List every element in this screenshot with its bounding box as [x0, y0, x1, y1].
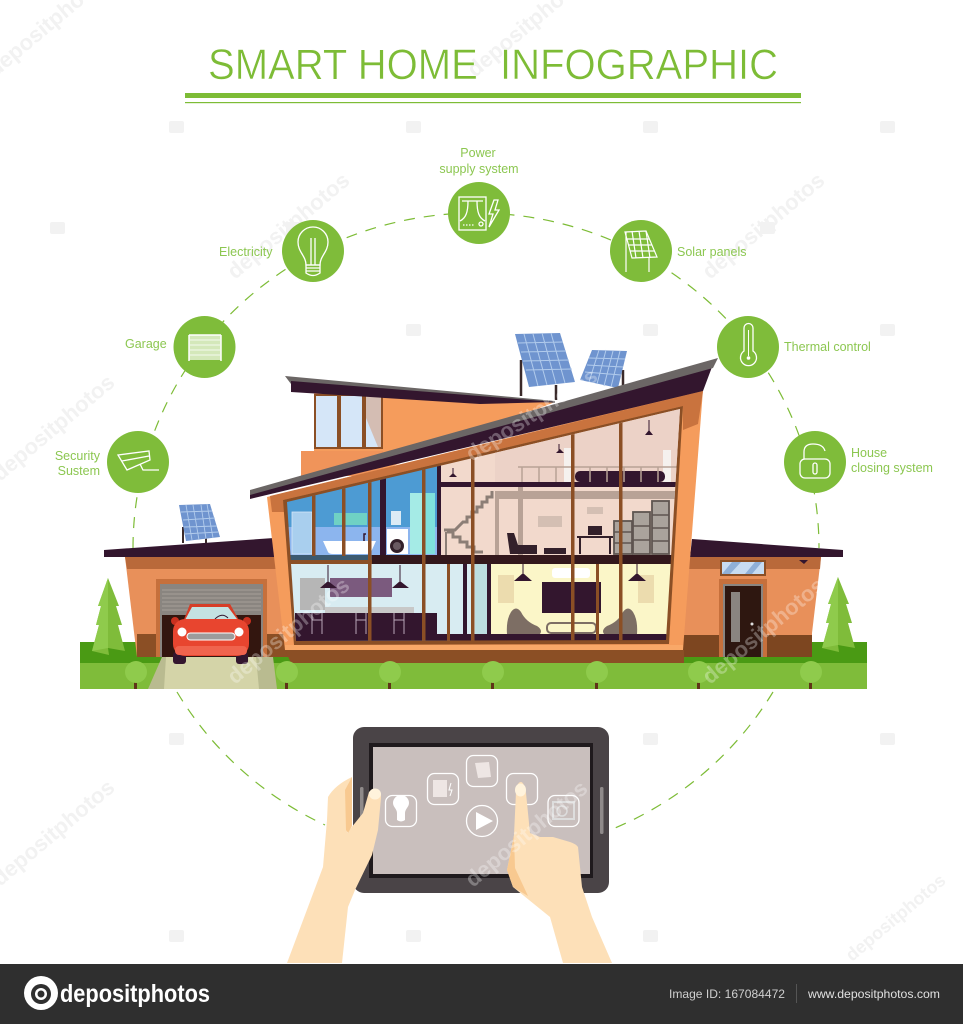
tree: right	[822, 577, 855, 652]
node: power supply system: supply system	[439, 162, 519, 176]
node: thermal control: Thermal control	[784, 340, 871, 354]
website: www.depositphotos.com	[807, 987, 940, 1001]
footer bar	[0, 964, 963, 1024]
node: garage: Garage	[125, 337, 167, 351]
watermark overlays: depositphotos	[222, 572, 354, 689]
window	[720, 560, 766, 576]
tablet	[353, 727, 609, 893]
footer logo: depositphotos	[60, 980, 210, 1008]
main house	[250, 333, 718, 663]
solar panel: garage roof	[179, 504, 220, 543]
interior rooms	[280, 400, 685, 642]
watermarks: depositphotos	[222, 167, 354, 284]
hand: right	[507, 782, 612, 963]
tablet app icons	[386, 756, 579, 836]
node: security system	[55, 431, 169, 493]
walls	[267, 390, 703, 650]
hand: left	[287, 777, 381, 963]
watermark overlays: depositphotos	[697, 572, 829, 689]
title: SMART HOME INFOGRAPHIC	[208, 41, 778, 89]
node: house closing system	[784, 431, 933, 493]
dashed connection circle	[133, 213, 819, 828]
node: security system: Sustem	[58, 464, 100, 478]
front door	[719, 579, 767, 657]
bushes	[125, 661, 822, 689]
upper storey	[285, 376, 555, 476]
node: thermal control	[717, 316, 871, 378]
watermark overlays	[222, 363, 829, 892]
window frame	[283, 406, 683, 645]
watermark overlays: depositphotos	[460, 775, 592, 892]
node: power supply system	[439, 146, 519, 244]
driveway	[148, 657, 277, 689]
staircase	[444, 491, 492, 555]
room: bathroom and laundry	[287, 466, 441, 560]
room: kitchen	[285, 564, 475, 642]
room: living room	[475, 564, 681, 642]
solar panels: main roof	[515, 333, 627, 400]
right wing	[670, 539, 843, 657]
mullions	[312, 400, 622, 642]
node: security system: Security	[55, 449, 101, 463]
node: house closing system: closing system	[851, 461, 933, 475]
room: stairwell and study	[441, 400, 685, 555]
node: electricity	[219, 220, 344, 282]
watermarks: depositphotos	[697, 167, 829, 284]
watermark overlays: depositphotos	[461, 363, 602, 466]
node: power supply system: Power	[460, 146, 496, 160]
ground	[80, 642, 867, 689]
node: house closing system: House	[851, 446, 887, 460]
main roof	[250, 358, 718, 499]
image id: Image ID: 167084472	[669, 987, 785, 1001]
node: garage	[125, 316, 236, 378]
house base	[285, 645, 683, 650]
node: solar panels: Solar panels	[677, 245, 746, 259]
floor slab	[372, 555, 682, 564]
node: electricity: Electricity	[219, 245, 273, 259]
watermarks: depositphotos	[842, 870, 950, 965]
garage wing	[104, 504, 295, 664]
footer logo	[24, 976, 210, 1010]
tree: left	[92, 578, 125, 655]
node: solar panels	[610, 220, 746, 282]
car	[171, 604, 251, 664]
